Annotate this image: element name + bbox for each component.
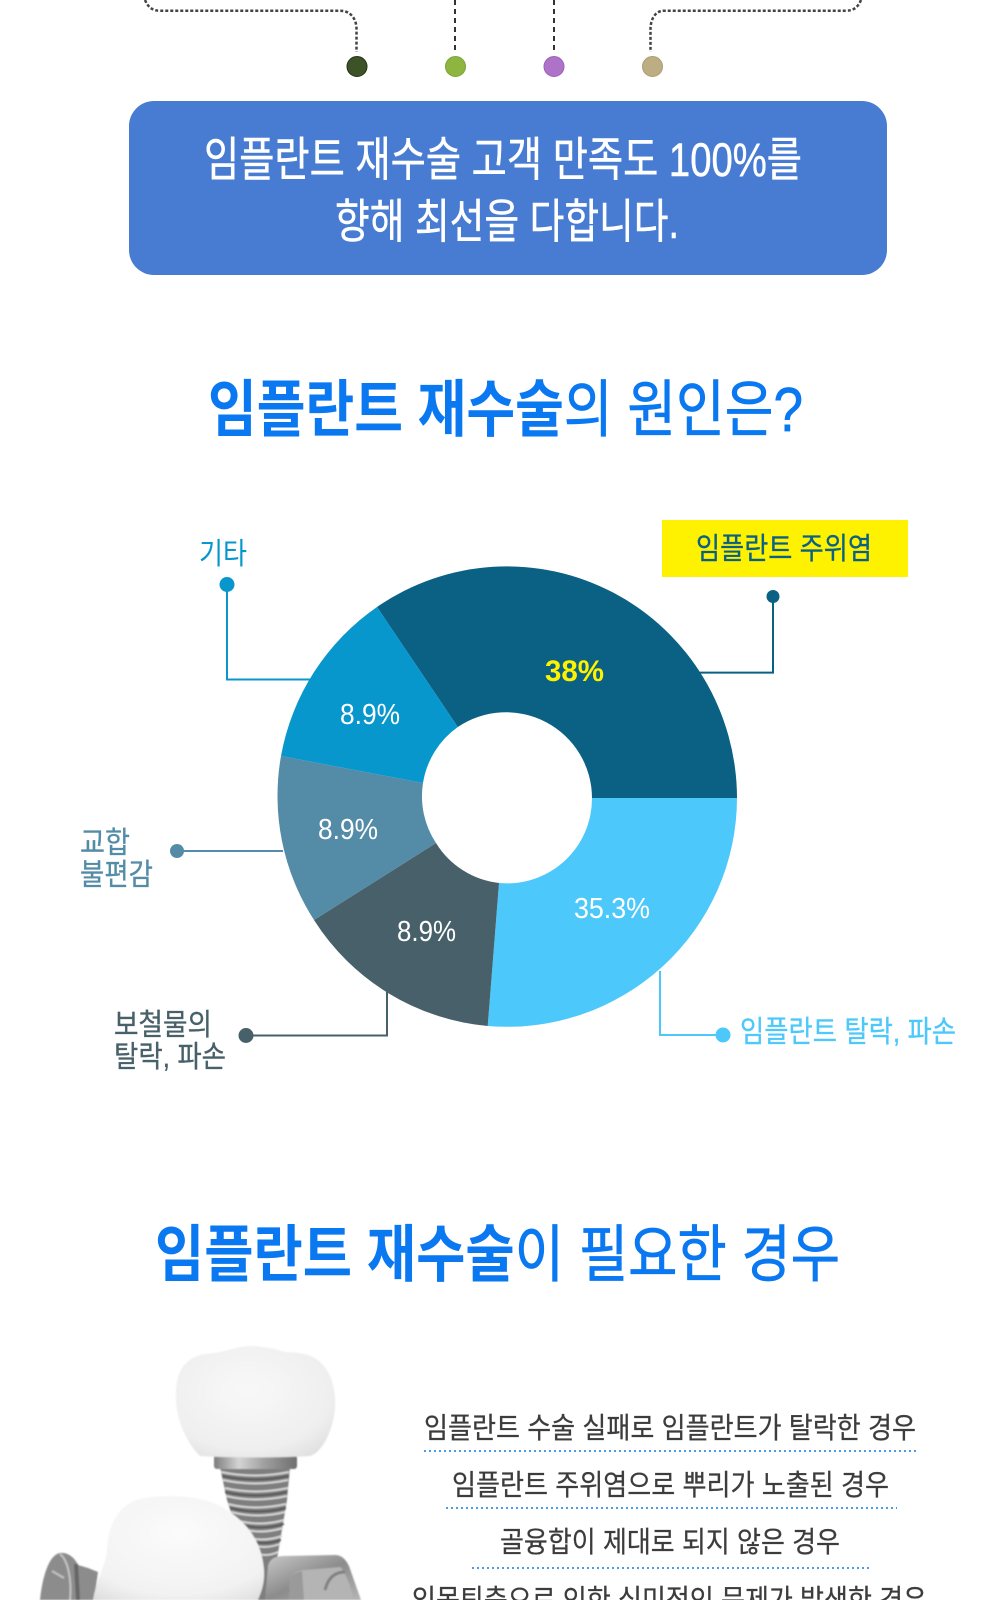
case 2: 임플란트 주위염으로 뿌리가 노출된 경우 — [452, 1469, 889, 1502]
label: other — [199, 538, 310, 680]
label: peri-implantitis — [662, 520, 908, 673]
list: cases requiring reoperation — [412, 1412, 927, 1600]
label: prosthesis detachment: 보철물의 — [114, 1009, 212, 1042]
case 1: 임플란트 수술 실패로 임플란트가 탈락한 경우 — [424, 1412, 916, 1445]
label: prosthesis detachment: 탈락, 파손 — [114, 1041, 226, 1074]
value: 8.9% other: 8.9% — [340, 699, 400, 731]
connector lines with dots — [145, 0, 861, 76]
heading: causes: 임플란트 재수술의 원인은? — [208, 376, 803, 445]
value: 38%: 38% — [545, 655, 604, 688]
label: prosthesis detachment — [114, 992, 387, 1074]
heading: when needed: 임플란트 재수술이 필요한 경우 — [155, 1221, 840, 1290]
value: 35.3%: 35.3% — [574, 893, 650, 925]
label: implant detachment: 임플란트 탈락, 파손 — [740, 1016, 956, 1049]
callout: satisfaction message — [129, 101, 887, 275]
label: occlusion discomfort — [80, 827, 283, 892]
label: occlusion discomfort: 불편감 — [80, 859, 153, 892]
implant collar — [214, 1455, 297, 1469]
value: 8.9% prosthesis: 8.9% — [397, 916, 456, 948]
label: occlusion discomfort: 교합 — [80, 827, 130, 860]
label: peri-implantitis: 임플란트 주위염 — [696, 533, 872, 566]
label: implant detachment — [660, 971, 956, 1049]
lower crown — [93, 1496, 264, 1600]
implant screw — [220, 1467, 290, 1600]
upper crown — [176, 1346, 335, 1458]
label: other: 기타 — [199, 538, 247, 571]
illustration: dental implants — [40, 1346, 361, 1600]
value: 8.9% occlusion: 8.9% — [318, 814, 378, 846]
callout: satisfaction message: 임플란트 재수술 고객 만족도 100%를 — [204, 133, 802, 186]
donut chart: causes — [277, 566, 737, 1027]
left abutment — [40, 1553, 98, 1600]
right abutment — [265, 1555, 361, 1600]
callout: satisfaction message: 향해 최선을 다합니다. — [335, 195, 679, 248]
case 3: 골융합이 제대로 되지 않은 경우 — [500, 1526, 840, 1559]
